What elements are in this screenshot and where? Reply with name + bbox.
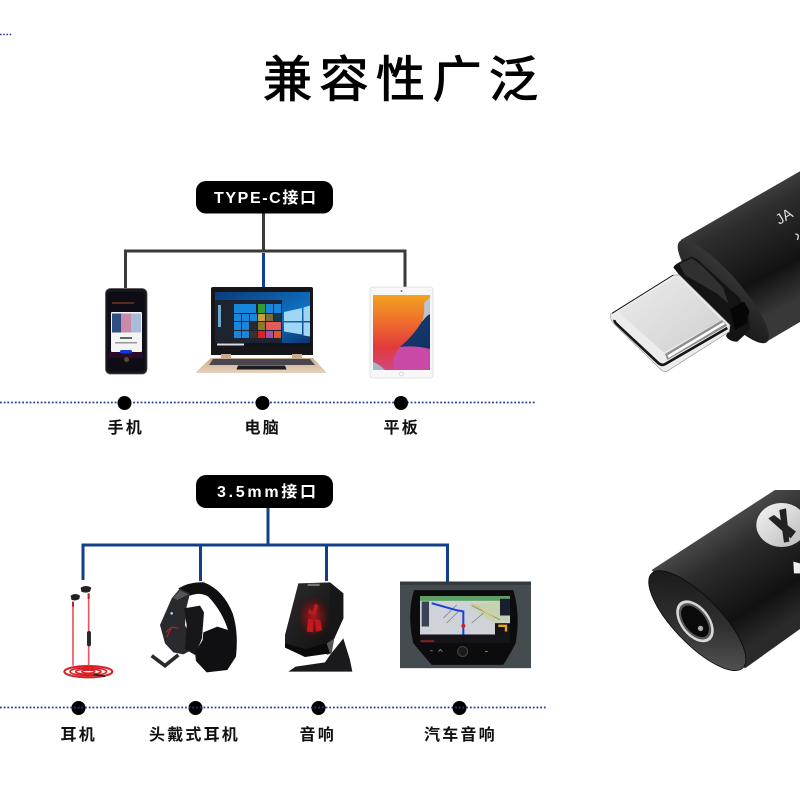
label: tablet: 平板 (384, 419, 420, 437)
product photo: USB-C end of adapter: JA (773, 206, 796, 228)
dotted timeline: 3.5mm (0, 701, 546, 715)
decorative top-left dots (0, 34, 12, 36)
pill: TYPE-C port (196, 181, 333, 214)
title: 兼容性广泛 (263, 54, 546, 108)
connector lines: 3.5mm tree (83, 508, 448, 582)
product photo: USB-C end of adapter (610, 169, 800, 371)
label: car audio: 汽车音响 (424, 725, 497, 744)
pill: TYPE-C port: TYPE-C接口 (214, 189, 316, 207)
label: phone: 手机 (108, 418, 144, 437)
device: laptop (196, 287, 326, 373)
label: speaker: 音响 (300, 725, 336, 744)
label: earphones: 耳机 (60, 726, 97, 744)
device: earphones (64, 586, 112, 677)
connector lines: TYPE-C tree (126, 213, 405, 288)
section: 3.5mm devices (0, 475, 546, 744)
label: computer: 电脑 (244, 418, 281, 437)
section: TYPE-C devices (0, 181, 536, 437)
device: gaming headset (152, 582, 237, 672)
pill: 3.5mm port (196, 475, 333, 508)
product photo: 3.5mm jack end of adapter (648, 490, 800, 671)
device: car navigation (400, 582, 531, 668)
device: phone (106, 288, 147, 374)
label: headset: 头戴式耳机 (149, 725, 240, 744)
pill: 3.5mm port: 3.5mm接口 (217, 483, 316, 501)
device: tablet (370, 287, 433, 378)
dotted timeline: TYPE-C (0, 396, 536, 410)
device: speaker (285, 582, 352, 672)
